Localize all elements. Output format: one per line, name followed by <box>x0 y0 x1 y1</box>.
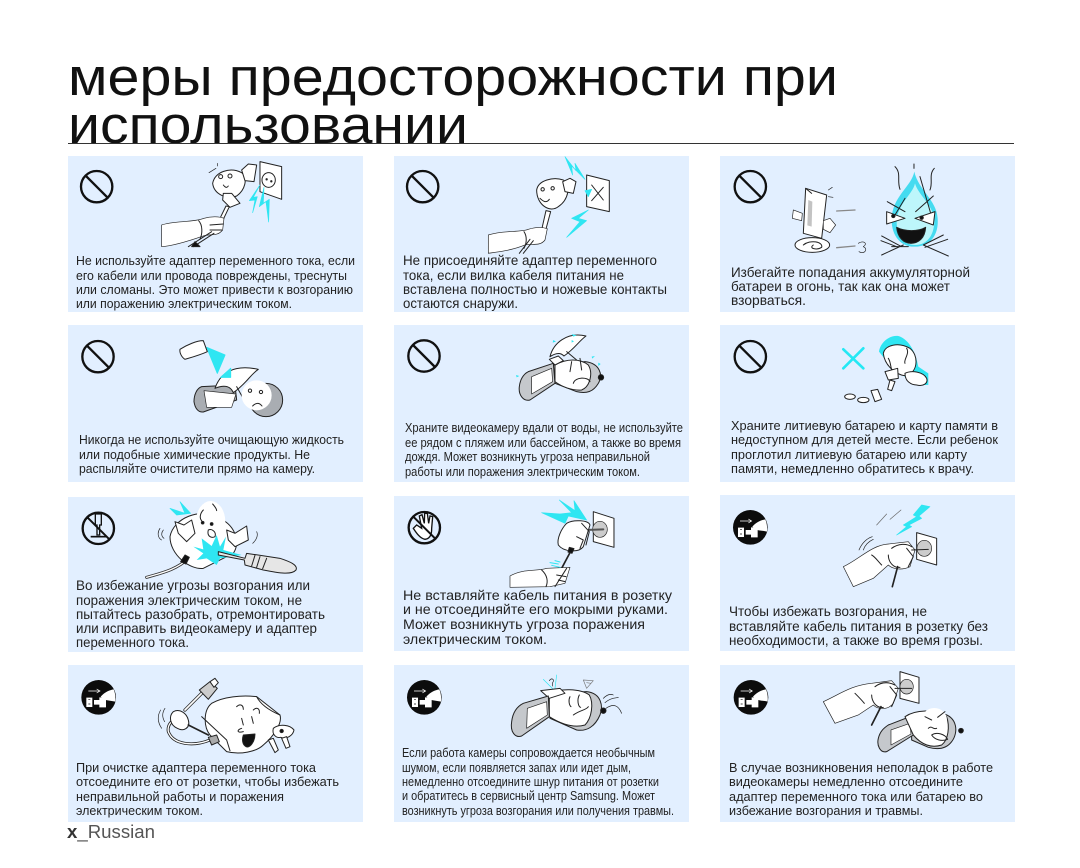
text block <box>729 603 988 648</box>
text block: тока, если вилка кабеля питания не <box>403 267 624 283</box>
panel: battery and fire <box>720 156 1015 312</box>
text block: переменного тока. <box>76 634 189 650</box>
illustration: adapter plugged with wet hand <box>510 500 614 587</box>
title: меры предосторожности при <box>68 48 838 107</box>
illustration: hand pulling damaged plug by wall socket <box>162 162 282 247</box>
icon: unplug <box>734 680 768 715</box>
icon: prohibition <box>735 341 766 372</box>
text block: Никогда не используйте очищающую жидкость <box>79 432 344 447</box>
text block <box>403 252 667 311</box>
text block <box>731 418 998 476</box>
text block: его кабели или провода повреждены, треснуты <box>76 268 347 283</box>
text block: Чтобы избежать возгорания, не <box>729 603 927 619</box>
text block: адаптер переменного тока или батарею во <box>729 789 983 804</box>
icon: unplug <box>407 680 442 715</box>
text block <box>729 760 993 818</box>
text block: немедленно отсоедините шнур питания от розетки <box>402 774 659 789</box>
illustration: frightened battery and flame <box>792 164 948 256</box>
text block: Храните видеокамеру вдали от воды, не используйте <box>405 420 683 435</box>
text block <box>76 577 325 650</box>
text block: шумом, если появляется запах или идет дым, <box>402 760 631 775</box>
illustration: camera holding umbrella in the rain <box>516 334 604 400</box>
text block: проглотил литиевую батарею или карту <box>731 447 967 462</box>
text block: Во избежание угрозы возгорания или <box>76 577 310 593</box>
text block: Не присоединяйте адаптер переменного <box>403 252 657 268</box>
text block: видеокамеры немедленно отсоедините <box>729 774 963 789</box>
panel: cleaning adapter <box>68 665 363 822</box>
panel: malfunction <box>720 665 1015 822</box>
text block: или сломаны. Это может привести к возгоранию <box>76 282 353 297</box>
text block: распыляйте очистители прямо на камеру. <box>79 461 315 476</box>
text block: Не используйте адаптер переменного тока, если <box>76 253 355 268</box>
panel: keep battery from children <box>720 325 1015 482</box>
panel: no cleaning fluid <box>68 325 363 482</box>
panel: unusual noise or smell <box>394 665 689 822</box>
text block: дождя. Может возникнуть угроза неправильной <box>405 449 650 464</box>
text block: взорваться. <box>731 292 806 308</box>
icon: unplug <box>733 510 768 545</box>
illustration: partially inserted plug with sparks <box>488 157 609 253</box>
text block <box>76 253 355 311</box>
text block <box>731 264 970 308</box>
text block: электрическим током. <box>403 631 547 647</box>
panel: wet hands <box>394 496 689 651</box>
text block: батареи в огонь, так как она может <box>731 278 951 294</box>
illustration: spray can and camera with umbrella <box>180 341 283 417</box>
text block: или исправить видеокамеру и адаптер <box>76 620 317 636</box>
text block: поражения электрическим током, не <box>76 592 302 608</box>
icon: prohibition <box>81 171 112 202</box>
text block: или подобные химические продукты. Не <box>79 447 310 462</box>
icon: unplug <box>81 680 116 715</box>
title <box>68 48 838 155</box>
icon: prohibition <box>407 171 438 202</box>
text block <box>79 432 344 476</box>
illustration: adapter being opened with screwdriver <box>147 501 296 577</box>
panel: plug not fully inserted <box>394 156 689 312</box>
text block: отсоедините его от розетки, чтобы избежать <box>76 774 339 789</box>
text block: пытайтесь разобрать, отремонтировать <box>76 606 325 622</box>
text block: ее рядом с пляжем или бассейном, а также во время <box>405 435 681 450</box>
text block <box>76 760 339 818</box>
text block: Если работа камеры сопровождается необычным <box>402 745 655 760</box>
text block: При очистке адаптера переменного тока <box>76 760 317 775</box>
panel: keep camera away from water <box>394 325 689 482</box>
icon: no disassembly <box>83 513 114 544</box>
icon: prohibition <box>82 341 114 372</box>
illustration: hand unplugging during lightning <box>843 505 937 587</box>
illustration: baby with batteries and memory card <box>843 336 928 403</box>
illustration: unplugging and angry camera <box>823 672 963 752</box>
footer: page label: x_Russian <box>67 822 155 843</box>
icon: no wet hands <box>409 512 440 543</box>
text block: неправильной работы и поражения <box>76 789 284 804</box>
text block: Может возникнуть угроза поражения <box>403 616 645 632</box>
text block: Избегайте попадания аккумуляторной <box>731 264 970 280</box>
title: использовании <box>68 96 468 155</box>
text block: памяти, немедленно обратитесь к врачу. <box>731 461 974 476</box>
text block: вставляйте кабель питания в розетку без <box>729 618 988 634</box>
text block: недоступном для детей месте. Если ребенок <box>731 432 998 447</box>
text block: возникнуть угроза возгорания или получения травмы. <box>402 803 674 818</box>
illustration: camera with smoke and question mark <box>511 675 622 736</box>
text block: и обратитесь в сервисный центр Samsung. Может <box>402 788 655 803</box>
icon: prohibition <box>408 340 440 372</box>
text block <box>405 420 683 479</box>
text block: работы или поражения электрическим током. <box>405 464 640 479</box>
text block: Храните литиевую батарею и карту памяти в <box>731 418 998 433</box>
icon: prohibition <box>735 171 766 202</box>
text block: остаются снаружи. <box>403 295 518 311</box>
text block: и не отсоединяйте его мокрыми руками. <box>403 601 668 617</box>
text block <box>402 745 674 818</box>
text block: избежание возгорания и травмы. <box>729 803 923 818</box>
text block: вставлена полностью и ножевые контакты <box>403 281 667 297</box>
text block: электрическим током. <box>76 803 203 818</box>
text block: или поражению электрическим током. <box>76 296 292 311</box>
text block: Не вставляйте кабель питания в розетку <box>403 587 672 603</box>
text block <box>403 587 672 647</box>
panel: damaged adapter cable <box>68 156 363 312</box>
text block: необходимости, а также во время грозы. <box>729 632 983 648</box>
text block: В случае возникновения неполадок в работе <box>729 760 993 775</box>
panel: do not disassemble <box>68 497 363 652</box>
illustration: smiling adapter holding its cable plug <box>158 678 294 753</box>
panel: thunderstorm <box>720 495 1015 651</box>
